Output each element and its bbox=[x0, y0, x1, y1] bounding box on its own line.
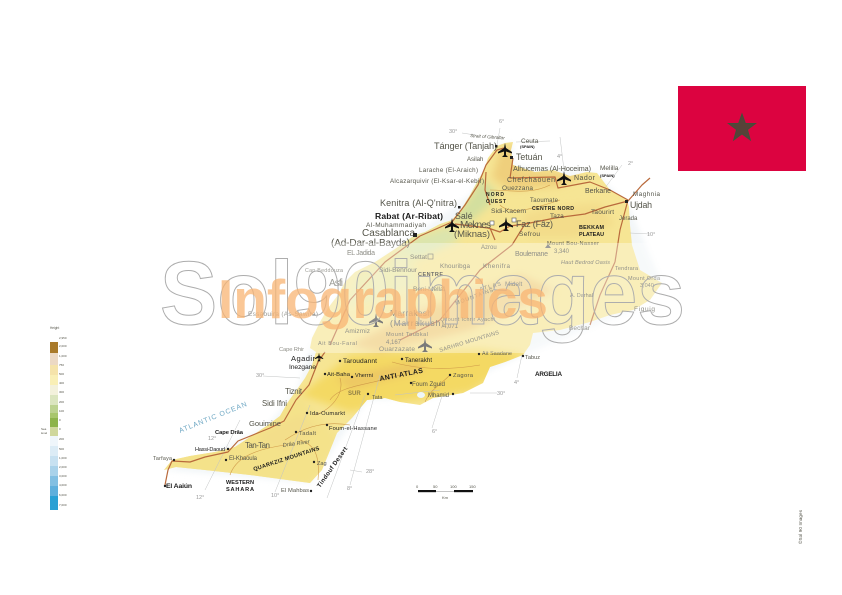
city and region labels: CENTRE bbox=[418, 272, 443, 278]
elevation legend bbox=[41, 326, 67, 510]
city and region labels: Khouribga bbox=[440, 263, 470, 270]
city and region labels: Alhucemas (Al-Hoceima) bbox=[513, 164, 591, 173]
city and region labels: 10° bbox=[271, 493, 279, 499]
rivers bbox=[230, 185, 560, 480]
city and region labels: El-Khaoula bbox=[229, 456, 258, 462]
credit: ©Sol 90 Images bbox=[797, 509, 803, 544]
physical map of Morocco bbox=[150, 119, 680, 501]
city and region labels: Tanerakht bbox=[405, 358, 432, 364]
city and region labels: Bechar bbox=[569, 325, 591, 332]
city and region labels: Tetuán bbox=[516, 152, 543, 162]
city and region labels: (Miknas) bbox=[454, 229, 490, 240]
city and region labels: Ujdah bbox=[630, 200, 652, 210]
city and region labels: Mount Toubkal bbox=[386, 332, 428, 338]
city and region labels: Ait-Baha bbox=[327, 372, 351, 378]
graticule lines bbox=[205, 128, 650, 498]
city and region labels: SAHARA bbox=[226, 487, 254, 493]
city and region labels: Rabat (Ar-Ribat) bbox=[375, 211, 443, 221]
city and region labels: Ida-Oumarkt bbox=[310, 411, 345, 417]
city and region labels: Beni-Mellal bbox=[413, 286, 446, 293]
city and region labels: 8° bbox=[347, 486, 352, 492]
city and region labels: Taza bbox=[550, 213, 564, 220]
city and region labels: ARGELIA bbox=[535, 371, 562, 378]
elevation legend: 2,950 bbox=[59, 336, 67, 340]
city and region labels: PLATEAU bbox=[579, 232, 604, 238]
city and region labels: (Marrakush) bbox=[390, 318, 444, 328]
city and region labels: Haut Bedrod Oasis bbox=[561, 260, 610, 266]
mountain and desert labels: MOUNTAINS bbox=[455, 287, 495, 307]
city and region labels: WESTERN bbox=[226, 480, 254, 486]
city and region labels: A. Darhal bbox=[570, 293, 593, 299]
elevation legend: 400 bbox=[59, 381, 64, 385]
main roads bbox=[165, 148, 650, 485]
city and region labels: BEKKAM bbox=[579, 225, 604, 231]
city and region labels: Mount Bou-Nasser bbox=[547, 241, 599, 247]
city and region labels: Alcazarquivir (El-Ksar-el-Kebir) bbox=[390, 178, 484, 185]
city and region labels: 12° bbox=[208, 436, 216, 442]
city and region labels: Ait Bou-Faral bbox=[318, 341, 357, 347]
flag of Morocco bbox=[678, 86, 806, 171]
elevation legend: Sea bbox=[41, 427, 47, 431]
city and region labels: (SPAIN) bbox=[520, 144, 535, 149]
city and region labels: Boulemane bbox=[515, 251, 548, 258]
land relief bbox=[164, 142, 662, 483]
city and region labels: Marrakesh bbox=[390, 308, 432, 318]
scale bar bbox=[416, 484, 476, 500]
elevation legend: 1,000 bbox=[59, 354, 67, 358]
city and region labels: Cape Drâa bbox=[215, 430, 244, 436]
elevation legend: 500 bbox=[59, 372, 64, 376]
city and region labels: 2° bbox=[628, 161, 633, 167]
city and region labels: Azrou bbox=[481, 245, 497, 251]
city and region labels: Khenifra bbox=[483, 263, 510, 270]
city and region labels: (Ad-Dar-al-Bayda) bbox=[331, 238, 410, 249]
city and region labels: Zagora bbox=[453, 373, 474, 379]
city and region labels: 30° bbox=[497, 391, 505, 397]
elevation legend: 4,000 bbox=[59, 483, 67, 487]
city and region labels: Inezgane bbox=[289, 364, 316, 371]
city and region labels: Ceuta bbox=[521, 138, 539, 145]
mountain and desert labels: QUARKZIZ MOUNTAINS bbox=[253, 446, 320, 473]
city and region labels: Foum Zguid bbox=[412, 381, 446, 388]
city and region labels: Tiznit bbox=[285, 387, 303, 396]
city and region labels: Cap Beddouza bbox=[305, 268, 343, 274]
mountain and desert labels: SARHRO MOUNTAINS bbox=[439, 330, 500, 354]
elevation legend: 750 bbox=[59, 363, 64, 367]
scale bar: 0 bbox=[416, 484, 419, 489]
mountain and desert labels bbox=[178, 281, 502, 489]
elevation legend: 0 bbox=[59, 418, 61, 422]
city and region labels: Zag bbox=[317, 461, 327, 467]
airports bbox=[315, 143, 571, 361]
city and region labels: Maghnia bbox=[633, 191, 660, 198]
city and region labels: Mount Orda bbox=[628, 276, 661, 282]
city and region labels: Amizmiz bbox=[345, 328, 370, 335]
elevation legend: 0 bbox=[59, 427, 61, 431]
city and region labels: Ouarzazate bbox=[379, 346, 415, 353]
city and region labels: Salé bbox=[455, 211, 473, 221]
city and region labels: 4,167 bbox=[386, 340, 402, 346]
city and region labels: Meknes bbox=[460, 220, 491, 231]
watermark: Infographics: Infographics bbox=[218, 268, 548, 330]
city and region labels: Ait Saadane bbox=[482, 351, 512, 357]
elevation legend: 2,000 bbox=[59, 465, 67, 469]
mountain and desert labels: ATLAS bbox=[479, 281, 502, 293]
city and region labels: Al-Muhammadiyah bbox=[366, 222, 426, 229]
elevation legend: 6,000 bbox=[59, 493, 67, 497]
city and region labels: 4,071 bbox=[443, 324, 459, 330]
city and region labels: Sidi-Bennour bbox=[379, 267, 418, 274]
city and region labels: Chefchaouen bbox=[507, 177, 555, 184]
city and region labels: Sefrou bbox=[519, 231, 540, 238]
city and region labels: Faz (Fâz) bbox=[516, 219, 553, 229]
city and region labels: Ouezzana bbox=[502, 185, 533, 192]
city and region labels: Sidi Ifni bbox=[262, 399, 287, 408]
city and region labels: Agadir bbox=[291, 354, 315, 363]
elevation legend: 3,000 bbox=[59, 474, 67, 478]
city and region labels: CENTRE NORD bbox=[532, 206, 574, 212]
elevation legend: Height bbox=[50, 326, 59, 330]
city and region labels: Settat bbox=[410, 254, 427, 261]
elevation legend: 500 bbox=[59, 447, 64, 451]
city and region labels: Cape Rhir bbox=[279, 347, 304, 353]
city and region labels: Sidi-Kacem bbox=[491, 208, 526, 215]
city and region labels: Taourirt bbox=[591, 209, 614, 216]
city and region labels: Mount Ichrir Ayachi bbox=[443, 317, 495, 323]
city and region labels: 6° bbox=[499, 119, 504, 125]
city and region labels: (SPAIN) bbox=[600, 173, 615, 178]
city and region labels: Asfi bbox=[329, 278, 343, 289]
city and region labels: SUR bbox=[348, 391, 361, 397]
city and region labels: Melilla bbox=[600, 165, 619, 172]
scale bar: 50 bbox=[433, 484, 438, 489]
city and region labels: 3,340 bbox=[554, 249, 570, 255]
scale bar: 100 bbox=[450, 484, 457, 489]
city and region labels: Mhamid bbox=[428, 393, 449, 399]
city and region labels: Tadalt bbox=[299, 431, 316, 437]
city and region labels: Kenitra (Al-Q'nitra) bbox=[380, 198, 457, 208]
city and region labels: Hassi-Daoud bbox=[195, 447, 225, 453]
elevation legend: 2,000 bbox=[59, 344, 67, 348]
watermark backing band bbox=[160, 243, 685, 353]
city and region labels: Tánger (Tanjah) bbox=[434, 141, 497, 151]
city and region labels: El Mahbas bbox=[281, 488, 309, 494]
mountain and desert labels: ATLANTIC OCEAN bbox=[178, 401, 249, 435]
city markers bbox=[164, 145, 628, 492]
city and region labels: 10° bbox=[647, 232, 655, 238]
city and region labels: Tan-Tan bbox=[245, 441, 270, 450]
elevation legend: 300 bbox=[59, 390, 64, 394]
coastal shadow bbox=[164, 142, 662, 483]
city and region labels: 4° bbox=[514, 380, 519, 386]
mountain and desert labels: ANTI ATLAS bbox=[379, 368, 424, 383]
elevation legend: 200 bbox=[59, 437, 64, 441]
scale bar: Km bbox=[442, 495, 449, 500]
elevation legend: 7,000 bbox=[59, 503, 67, 507]
city and region labels: Foum-el-Hassane bbox=[329, 426, 377, 432]
city and region labels: EL Jadida bbox=[347, 250, 375, 257]
elevation legend: level bbox=[41, 431, 48, 435]
elevation legend: 1,000 bbox=[59, 456, 67, 460]
city and region labels: Casablanca bbox=[362, 228, 415, 239]
city and region labels: OUEST bbox=[486, 199, 506, 205]
city and region labels: Figuig bbox=[634, 306, 655, 313]
city and region labels: Asilah bbox=[467, 157, 483, 163]
city and region labels: Strait of Gibraltar bbox=[470, 133, 505, 140]
city and region labels: 6° bbox=[432, 429, 437, 435]
city and region labels: Tendrara bbox=[615, 266, 639, 272]
city and region labels: Tabuz bbox=[525, 355, 540, 361]
city and region labels: 3,040 bbox=[640, 283, 654, 289]
city and region labels: Berkane bbox=[585, 188, 611, 195]
city and region labels: Tata bbox=[372, 395, 383, 401]
elevation legend: 200 bbox=[59, 400, 64, 404]
city and region labels: 30° bbox=[256, 373, 264, 379]
city and region labels: Tarfaya bbox=[153, 456, 172, 462]
city and region labels: 30° bbox=[449, 129, 457, 135]
city and region labels: Larache (El-Araich) bbox=[419, 167, 478, 174]
city and region labels bbox=[153, 119, 661, 501]
water reservoir bbox=[417, 392, 425, 398]
city and region labels: Nador bbox=[574, 175, 596, 182]
city and region labels: 12° bbox=[196, 495, 204, 501]
city and region labels: Jerada bbox=[619, 216, 638, 222]
city and region labels: NORD bbox=[486, 192, 504, 198]
city and region labels: Drâa River bbox=[282, 439, 311, 449]
mountain and desert labels: Tindouf Desert bbox=[316, 446, 349, 489]
elevation legend: 100 bbox=[59, 409, 64, 413]
scale bar: 150 bbox=[469, 484, 476, 489]
city and region labels: Vherrni bbox=[355, 373, 373, 379]
city and region labels: 4° bbox=[557, 154, 562, 160]
city and region labels: Essaouira (As-Sawira) bbox=[248, 311, 318, 318]
city and region labels: Midelt bbox=[505, 281, 523, 288]
city and region labels: Taroudannt bbox=[343, 358, 377, 365]
city and region labels: Taoumate bbox=[530, 198, 559, 204]
watermark: Sol90images: Sol90images bbox=[160, 244, 685, 344]
city and region labels: Gouimine bbox=[249, 419, 281, 428]
city and region labels: El Aaiún bbox=[166, 483, 192, 490]
city and region labels: 28° bbox=[366, 469, 374, 475]
